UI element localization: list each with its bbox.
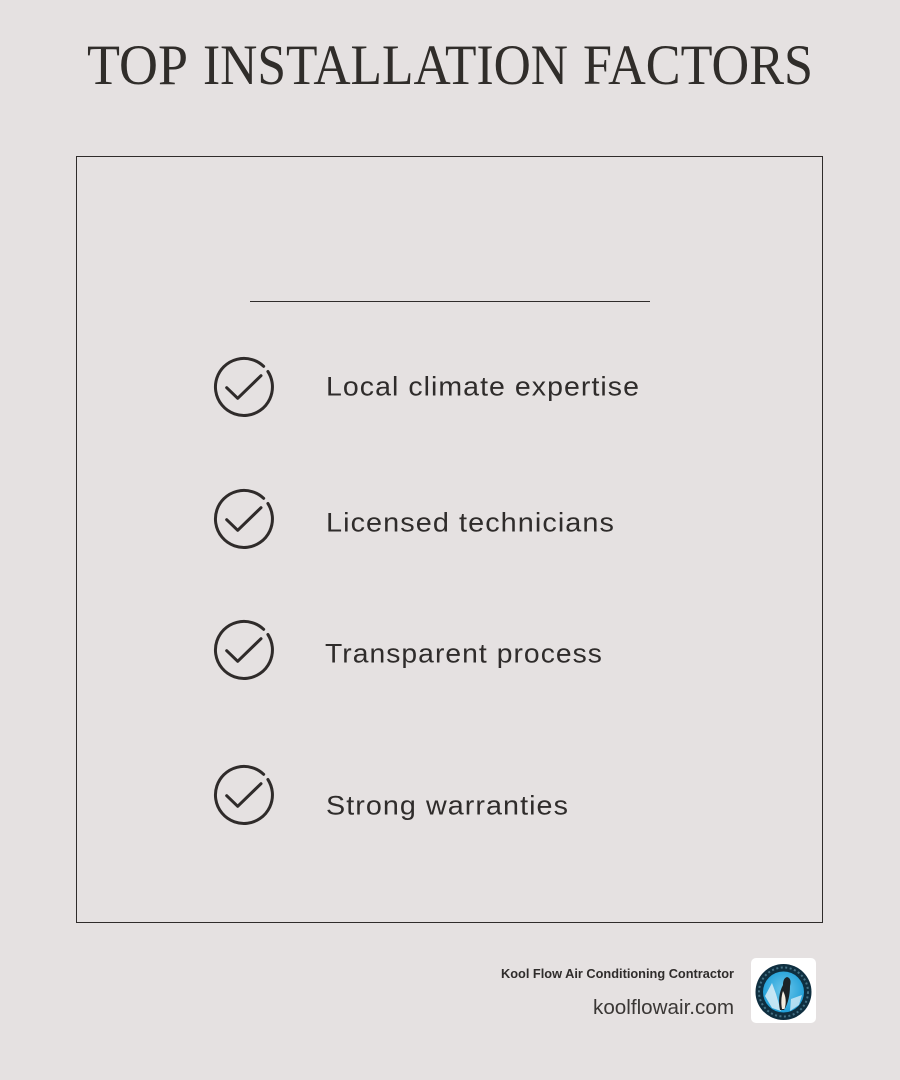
label: local climate expertise: Local climate expertise xyxy=(326,372,640,402)
icon: check circle 1 xyxy=(215,358,272,415)
footer: website: koolflowair.com xyxy=(593,997,734,1019)
label: licensed technicians: Licensed technicians xyxy=(326,508,615,538)
label: strong warranties: Strong warranties xyxy=(326,790,569,820)
title: TOP xyxy=(87,34,188,97)
panel: installation factors xyxy=(76,156,822,922)
icon: company logo xyxy=(751,958,816,1023)
icon: check circle 2 xyxy=(215,490,272,547)
title: INSTALLATION xyxy=(203,34,568,97)
title: FACTORS xyxy=(583,34,813,97)
icon: check circle 4 xyxy=(215,766,272,823)
label: transparent process: Transparent process xyxy=(325,638,603,668)
footer: company name: Kool Flow Air Conditioning Contractor xyxy=(501,966,734,981)
icon: check circle 3 xyxy=(215,621,272,678)
